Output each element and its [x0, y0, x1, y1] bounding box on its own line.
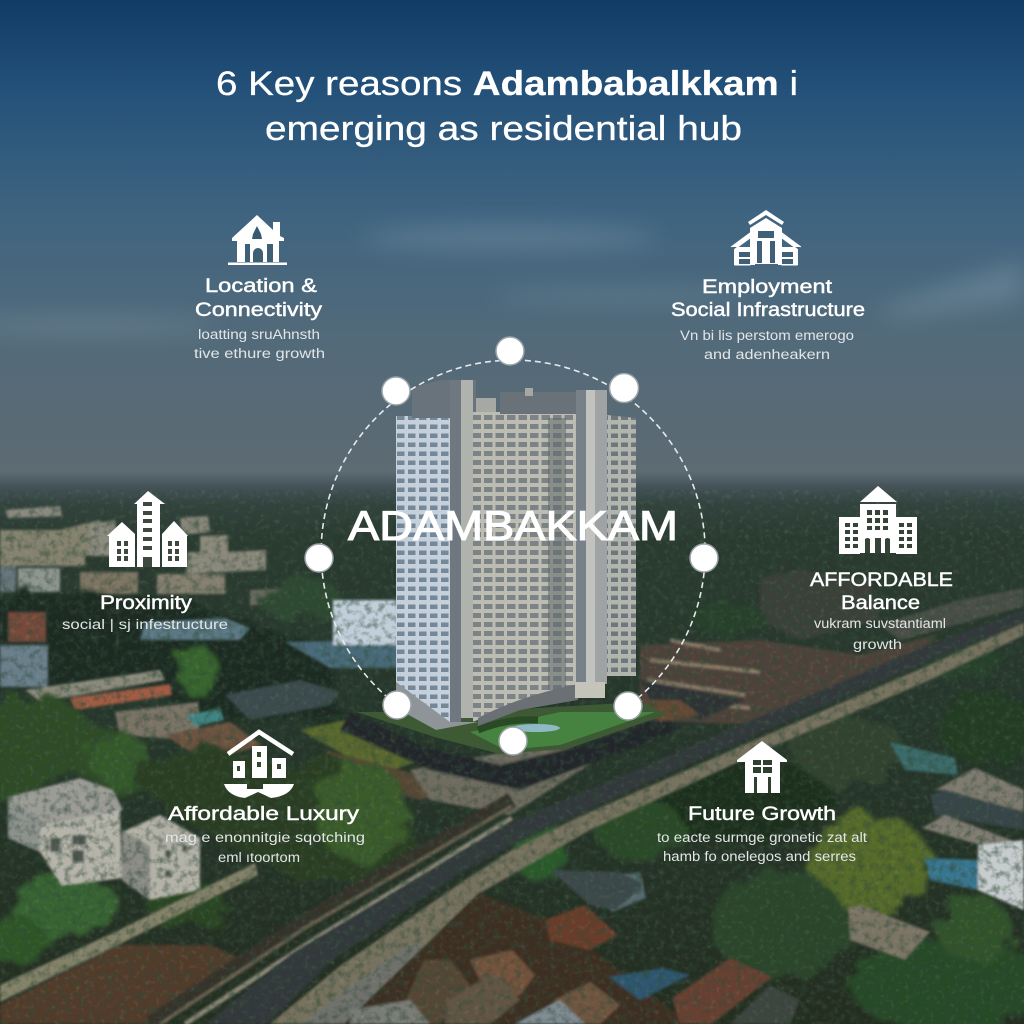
body text: to eacte surmge gronetic zat alt [657, 830, 867, 845]
background: sky [0, 0, 1024, 480]
body text [165, 830, 365, 865]
background: tree cover lower left [0, 875, 120, 964]
heading: Affordable Luxury [168, 804, 360, 825]
tower: right wing [607, 415, 636, 676]
heading: Balance [841, 593, 920, 614]
background: tree cover centre-left [130, 740, 420, 927]
dashed orbit ring [321, 360, 705, 706]
background: mid-left buildings [0, 600, 400, 762]
body text: tive ethure growth [194, 346, 325, 361]
title: 6 Key reasons Adambabalkkam i [216, 65, 798, 103]
body text: hamb fo onelegos and serres [663, 849, 856, 864]
body text: growth [853, 637, 902, 652]
tower: left wing cap [412, 380, 476, 418]
tower: right column [576, 390, 586, 686]
orbit nodes [305, 337, 718, 755]
body text: mag e enonnitgie sqotching [165, 830, 365, 845]
heading [671, 277, 865, 321]
icon: roof and towers [224, 732, 294, 798]
title [216, 65, 798, 148]
background: mid-left dark vegetation [0, 578, 340, 720]
body text: social | sj infestructure [62, 617, 228, 632]
panel: location and connectivity [194, 215, 325, 361]
tower: central cap [500, 392, 585, 414]
heading: Social Infrastructure [671, 300, 865, 321]
background: dark mottling [0, 490, 1024, 1024]
body text: eml ıtoortom [218, 850, 300, 865]
icon: house with windows [737, 741, 787, 793]
heading: Location & [205, 276, 317, 297]
background: white apartments bottom-left [8, 778, 200, 900]
background: right city and yards [640, 570, 1024, 725]
heading: Connectivity [195, 300, 323, 321]
heading: Employment [702, 277, 833, 298]
background: road [205, 610, 1024, 1024]
body text: loatting sruAhnsth [198, 327, 320, 342]
heading [195, 276, 323, 321]
body text [814, 616, 946, 652]
tower: dark core [450, 380, 461, 722]
heading: Future Growth [688, 804, 836, 825]
background: rail corridor [150, 800, 512, 1024]
centre label: ADAMBAKKAM [348, 502, 678, 549]
background: clouds [0, 226, 1024, 333]
background: distant city blocks left [0, 506, 300, 606]
tower: left wing [396, 416, 450, 726]
tower: garden podium [356, 682, 668, 754]
title: emerging as residential hub [265, 110, 742, 148]
tower: base [396, 682, 605, 730]
background: tree cover upper left [0, 695, 155, 800]
background: bottom earth and rooftops [345, 872, 800, 1024]
body text: and adenheakern [704, 347, 830, 362]
panel: affordable luxury [165, 732, 365, 865]
panel: employment and social infrastructure [671, 210, 865, 362]
central tower [356, 380, 668, 754]
panel: future growth [657, 741, 867, 864]
heading [810, 570, 953, 614]
tower: roof details [476, 388, 533, 412]
body text [194, 327, 325, 361]
icon: three towers [107, 491, 188, 567]
panel: proximity [62, 491, 228, 632]
body text: vukram suvstantiaml [814, 616, 946, 631]
body text [680, 328, 854, 362]
background: lots beside the tower [300, 712, 680, 815]
tower: central facade [473, 412, 576, 722]
body text [657, 830, 867, 864]
background: tree cover right [416, 604, 1024, 1024]
icon: house [228, 215, 287, 265]
heading: Proximity [100, 593, 193, 614]
body text: Vn bi lis perstom emerogo [680, 328, 854, 343]
icon: civic building [731, 210, 801, 265]
background: light mottling [0, 490, 1024, 1024]
icon: apartment block [839, 486, 917, 554]
background: ground [0, 472, 1024, 1024]
background: buildings bottom-right [550, 742, 1024, 960]
panel: affordable balance [810, 486, 953, 652]
heading: AFFORDABLE [810, 570, 953, 591]
background: embankment and dirt left [0, 863, 258, 1024]
